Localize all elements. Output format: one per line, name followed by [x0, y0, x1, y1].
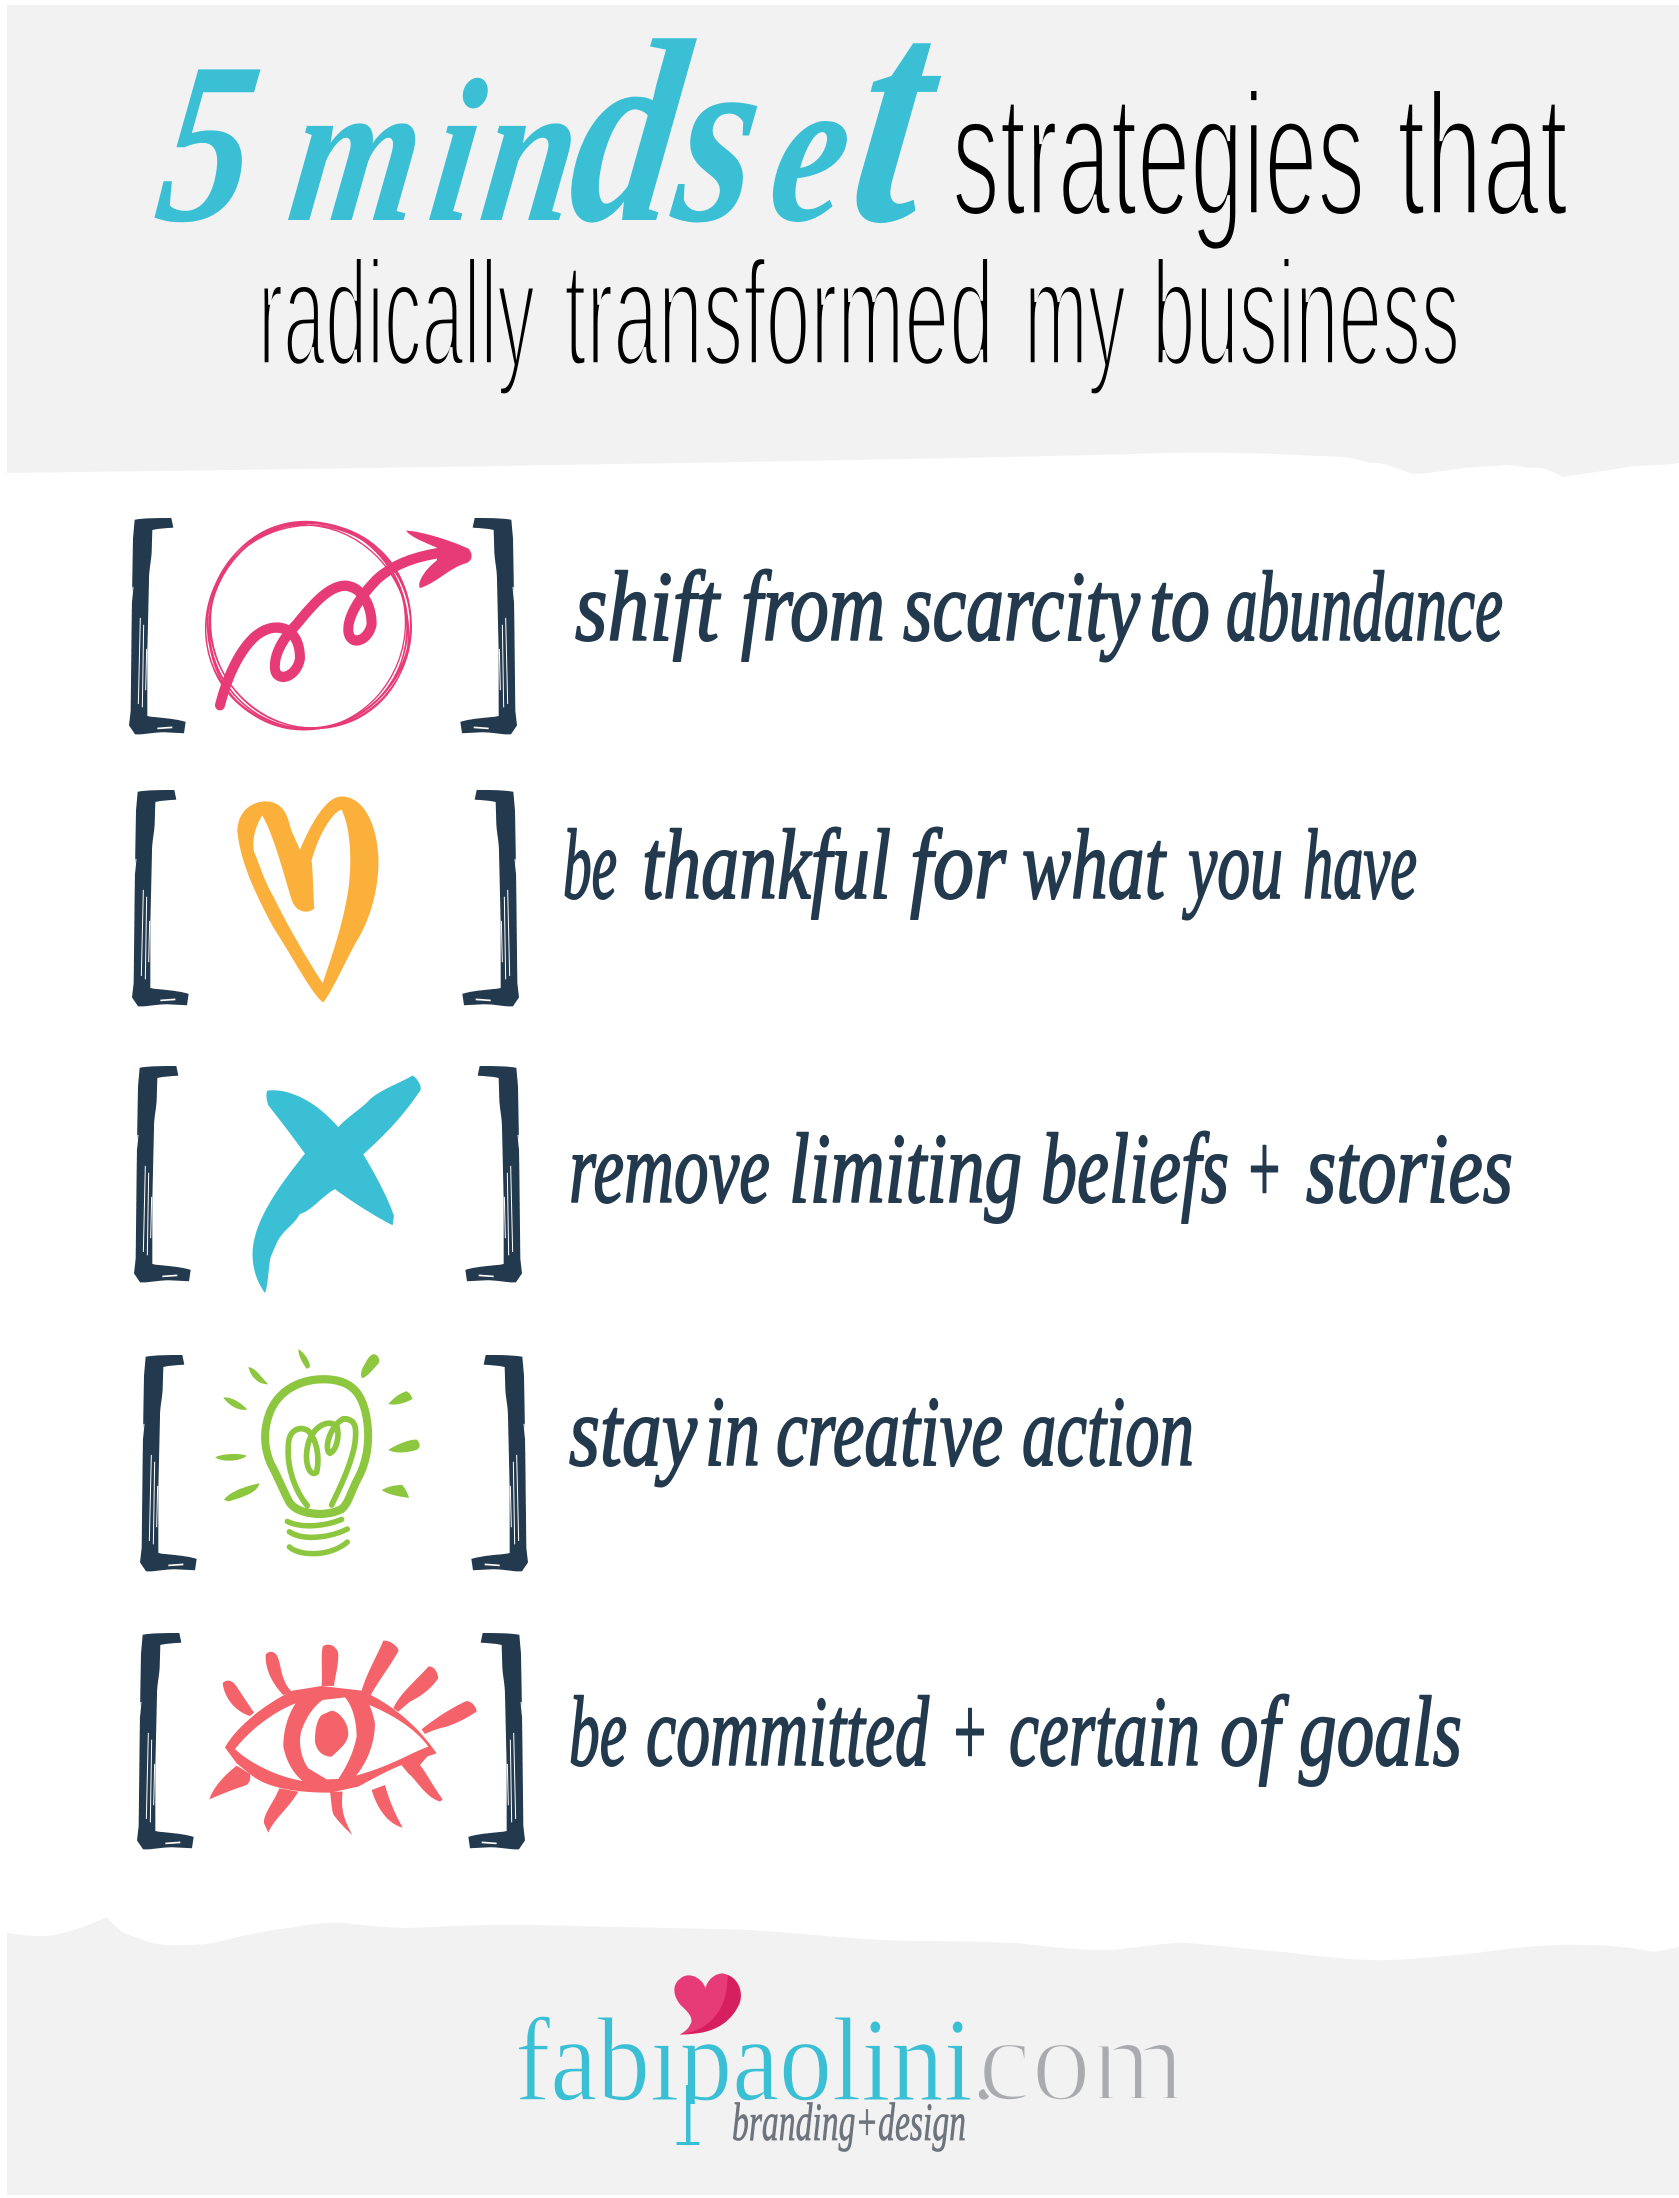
right bracket	[460, 518, 517, 734]
text: stay in creative action: in	[705, 1376, 760, 1487]
row 3: remove limiting beliefs + stories	[134, 1066, 1513, 1293]
title: thin black text: radically	[258, 229, 535, 397]
text: stay in creative action: stay	[569, 1376, 697, 1487]
title	[143, 0, 1568, 397]
text: be thankful for what you have: for	[910, 809, 1007, 920]
text: stay in creative action	[569, 1376, 1194, 1487]
text: be committed + certain of goals: +	[950, 1676, 989, 1787]
text: be committed + certain of goals: of	[1220, 1676, 1289, 1787]
title: thin black text: transformed	[564, 229, 994, 397]
text: shift from scarcity to abundance: shift	[575, 551, 721, 662]
row 5: be committed + certain of goals	[137, 1633, 1462, 1849]
text: shift from scarcity to abundance: abundance	[1226, 551, 1503, 662]
logo domain suffix: com	[978, 1993, 1185, 2126]
text: remove limiting beliefs + stories: stories	[1306, 1113, 1513, 1224]
text: remove limiting beliefs + stories: beliefs	[1041, 1113, 1229, 1224]
text: stay in creative action: creative	[776, 1376, 1003, 1487]
right bracket	[465, 1066, 522, 1282]
logo: fabipaolini.com	[515, 1973, 1185, 2152]
header background band	[7, 5, 1679, 477]
text: shift from scarcity to abundance	[575, 551, 1503, 662]
text: be committed + certain of goals: committed	[646, 1676, 930, 1787]
text: shift from scarcity to abundance: to	[1149, 551, 1210, 662]
right bracket	[462, 790, 519, 1006]
left bracket	[134, 1066, 191, 1282]
text: remove limiting beliefs + stories	[569, 1113, 1513, 1224]
text: stay in creative action: action	[1022, 1376, 1194, 1487]
left bracket	[137, 1633, 194, 1849]
left bracket	[140, 1355, 197, 1571]
text: remove limiting beliefs + stories: limiting	[789, 1113, 1022, 1224]
title: thin black text	[258, 58, 1568, 397]
row 1: shift from scarcity to abundance	[129, 483, 1503, 770]
footer background band	[7, 1917, 1679, 2195]
logo p descender	[665, 2085, 710, 2145]
title: cyan script text: min	[279, 39, 594, 265]
text: be thankful for what you have	[563, 809, 1417, 920]
text: be thankful for what you have: what	[1022, 809, 1167, 920]
icon: orange heart	[237, 797, 378, 1002]
logo domain suffix: .	[969, 1993, 999, 2126]
text: remove limiting beliefs + stories: +	[1245, 1113, 1283, 1224]
text: be thankful for what you have: thankful	[642, 809, 891, 920]
title: thin black text: my	[1024, 229, 1126, 397]
text: be committed + certain of goals: be	[569, 1676, 627, 1787]
text: be thankful for what you have: you	[1182, 809, 1283, 920]
icon: coral eye	[209, 1641, 477, 1835]
text: be thankful for what you have: be	[563, 809, 617, 920]
title: cyan script text: s	[660, 0, 779, 275]
text: remove limiting beliefs + stories: remove	[569, 1113, 770, 1224]
text: shift from scarcity to abundance: from	[741, 551, 885, 662]
text: be committed + certain of goals	[569, 1676, 1462, 1787]
text: be committed + certain of goals: certain	[1009, 1676, 1200, 1787]
title: cyan script text: 5	[145, 16, 273, 270]
logo tagline: branding+design	[732, 2092, 966, 2152]
icon: cyan X	[253, 1075, 421, 1293]
left bracket	[129, 518, 186, 734]
title: cyan script text: e	[758, 34, 866, 266]
left bracket	[132, 790, 189, 1006]
row 2: be thankful for what you have	[132, 790, 1417, 1006]
icon: arrow in sketched circle	[169, 483, 472, 770]
text: shift from scarcity to abundance: scarcity	[903, 551, 1140, 662]
right bracket	[468, 1633, 525, 1849]
logo heart	[640, 1973, 741, 2038]
text: be thankful for what you have: have	[1303, 809, 1417, 920]
right bracket	[471, 1355, 528, 1571]
row 4: stay in creative action	[140, 1349, 1194, 1571]
text: be committed + certain of goals: goals	[1299, 1676, 1462, 1787]
logo wordmark: fabipaolini	[515, 1993, 973, 2126]
icon: green light bulb	[215, 1349, 420, 1554]
